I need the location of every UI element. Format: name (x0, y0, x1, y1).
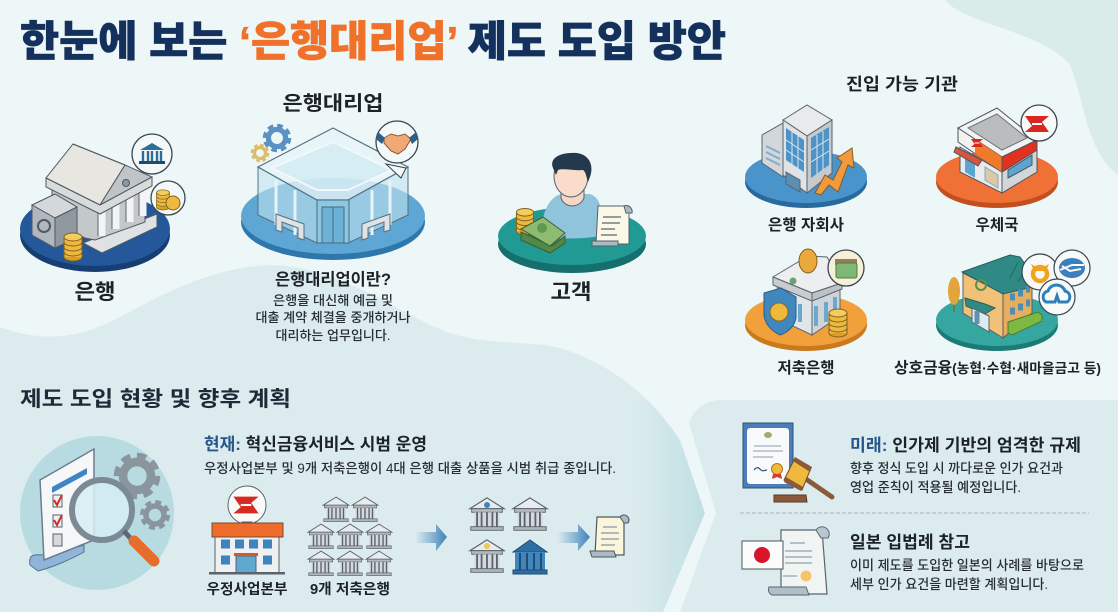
arrow (557, 524, 590, 551)
text block: Japan reference: 세부 인가 요건을 마련할 계획입니다. (850, 576, 1048, 592)
heading: status and plan: 제도 도입 현황 및 향후 계획 (20, 388, 291, 411)
text block: Japan reference: 일본 입법례 참고 (850, 533, 970, 552)
institution: post office (936, 105, 1058, 208)
label: post office: 우체국 (976, 216, 1018, 234)
text block: Japan reference: 이미 제도를 도입한 일본의 사례를 바탕으로 (850, 558, 1084, 573)
callout: what is agency banking: 은행을 대신해 예금 및 (273, 293, 393, 308)
callout: what is agency banking: 은행대리업이란? (275, 269, 391, 289)
callout: what is agency banking (256, 269, 411, 343)
title: 한눈에 보는 ‘은행대리업’ 제도 도입 방안 (20, 18, 726, 65)
divider (740, 512, 1089, 514)
heading: agency banking: 은행대리업 (282, 92, 384, 115)
label: bank: 은행 (74, 281, 116, 304)
text block: present (204, 435, 616, 476)
icon: shield (764, 288, 796, 335)
icon: document scroll (590, 515, 629, 557)
text block: Japan reference (850, 533, 1084, 592)
text block: future: 미래: 인가제 기반의 엄격한 규제 (850, 436, 1081, 455)
label: savings bank: 저축은행 (778, 359, 834, 377)
icon: handshake badge (376, 121, 418, 178)
label: bank subsidiary: 은행 자회사 (768, 216, 844, 234)
icon: cooperative badges (1022, 250, 1090, 315)
illustration: document review (20, 436, 174, 590)
heading: eligible institutions: 진입 가능 기관 (846, 75, 958, 94)
callout: what is agency banking: 대리하는 업무입니다. (276, 328, 390, 343)
icon: bank badge (132, 134, 172, 174)
icon group: nine savings banks (308, 497, 392, 576)
illustration: bank (20, 134, 185, 272)
illustration: customer (498, 153, 646, 273)
arrow (415, 524, 447, 551)
icon: post mark badge (1021, 105, 1057, 141)
icon: Japan flag and scroll (742, 527, 829, 595)
text block: present: 우정사업본부 및 9개 저축은행이 4대 은행 대출 상품을 시범 취급 종입니다. (204, 461, 616, 476)
text block: future: 향후 정식 도입 시 까다로운 인가 요건과 (850, 461, 1064, 476)
illustration: glass agency building (241, 121, 425, 260)
callout: what is agency banking: 대출 계약 체결을 중개하거나 (256, 310, 411, 325)
icon: certificate and gavel (743, 423, 832, 502)
institution: bank subsidiary (745, 105, 867, 208)
label: post headquarters: 우정사업본부 (206, 581, 288, 598)
text block: present: 현재: 혁신금융서비스 시범 운영 (204, 435, 427, 454)
icon group: four banks (470, 498, 547, 574)
icon: wallet badge (828, 250, 864, 286)
institution: savings bank (745, 249, 867, 351)
icon: coin badge (151, 181, 185, 215)
label: nine savings banks: 9개 저축은행 (310, 581, 390, 598)
label: mutual finance: 상호금융(농협·수협·새마을금고 등) (894, 359, 1101, 377)
text block: future: 영업 준칙이 적용될 예정입니다. (850, 480, 1021, 495)
institution: mutual finance (936, 250, 1090, 351)
text block: future (850, 436, 1081, 495)
icon: gears (253, 127, 288, 160)
label: customer: 고객 (550, 281, 592, 304)
icon: post headquarters (209, 486, 285, 574)
icon: contract scroll (592, 206, 632, 246)
